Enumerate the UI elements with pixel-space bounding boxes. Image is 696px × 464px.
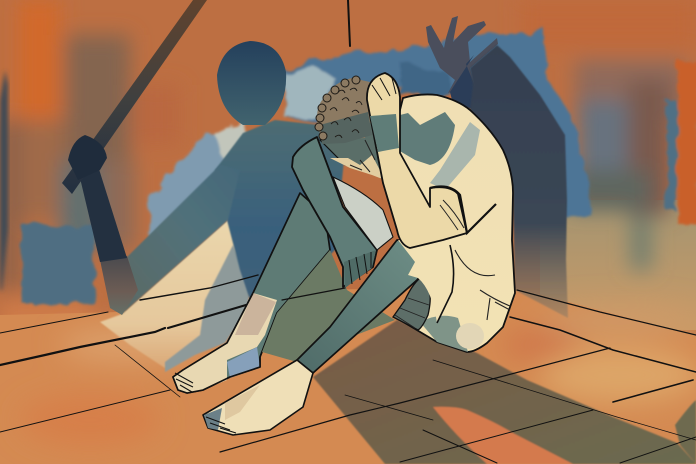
fingers on head — [372, 78, 396, 100]
upper arm shadow — [122, 165, 240, 314]
shadow: attacker with stick — [62, 0, 345, 372]
shorts — [393, 278, 430, 330]
torso and shirt — [395, 94, 515, 352]
raised arm holding head — [367, 73, 467, 248]
elbow shadow — [100, 256, 138, 315]
near leg — [297, 240, 432, 373]
near thigh — [398, 238, 453, 323]
shin between arm and torso — [333, 177, 393, 250]
far foot light — [173, 293, 277, 393]
stick — [62, 0, 207, 194]
head shadow — [217, 41, 286, 125]
wrist shadow — [370, 114, 399, 152]
hugging arm — [292, 137, 377, 287]
fingers — [344, 250, 376, 288]
far foot blue shade — [227, 347, 260, 378]
wall background — [0, 0, 696, 330]
curly hair — [315, 76, 372, 144]
chest shadow — [398, 112, 455, 165]
fist — [68, 135, 107, 180]
lower body shadow — [420, 316, 468, 352]
shoulder highlight — [430, 122, 480, 190]
torso shadow — [215, 120, 345, 300]
crouching man — [173, 73, 515, 435]
sleeve folds — [430, 187, 496, 233]
forearm shadow — [80, 166, 127, 262]
ground between legs — [262, 250, 395, 362]
shirt folds — [455, 250, 510, 320]
floor — [0, 288, 696, 464]
shadow: raised hand on the right — [426, 16, 568, 318]
blue wash behind the head — [282, 27, 590, 215]
near foot — [203, 360, 313, 435]
face — [320, 118, 385, 180]
light patch on wall — [100, 220, 250, 368]
toes — [175, 373, 236, 433]
floor shadow — [313, 320, 696, 464]
far leg and foot — [173, 193, 330, 393]
shorts folds — [395, 298, 429, 328]
pale leg shadow — [165, 245, 250, 372]
hip highlight — [456, 323, 484, 349]
